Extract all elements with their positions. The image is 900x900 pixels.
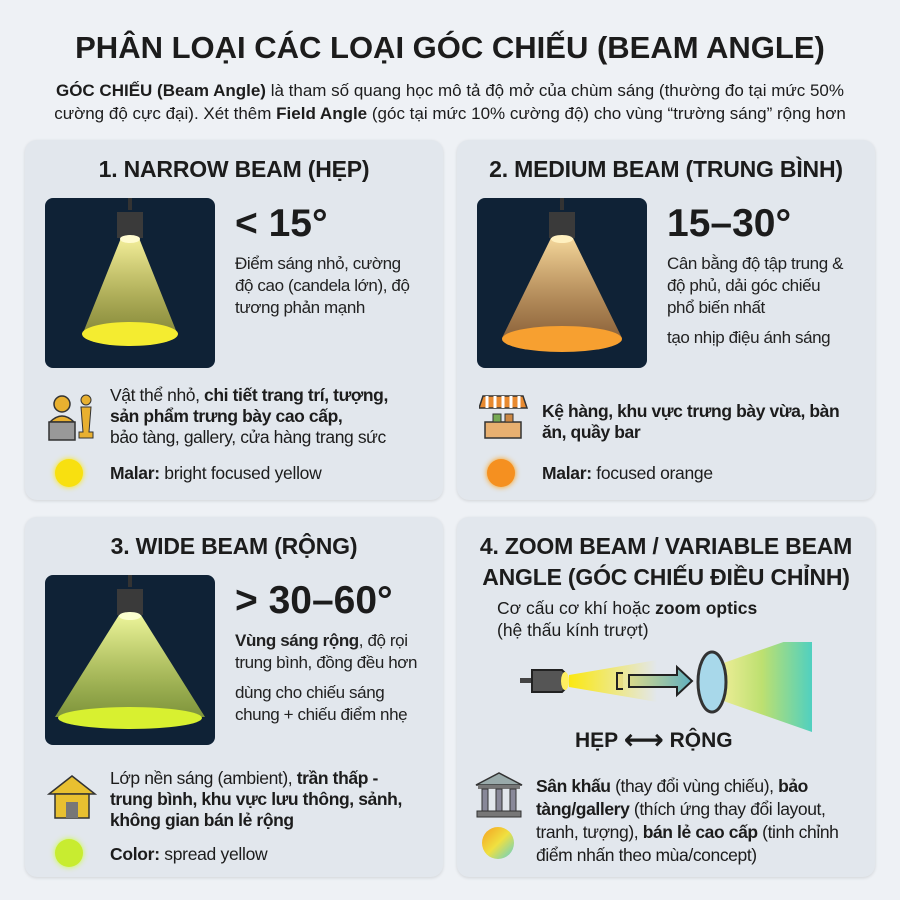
description: Vùng sáng rộng, độ rọi trung bình, đồng đều hơn [235,631,417,672]
description [667,254,844,347]
heading: 2. MEDIUM BEAM (TRUNG BÌNH) [489,156,843,182]
description [497,598,757,640]
illustration: narrow beam lamp [45,198,215,368]
description [235,631,417,724]
description: Cơ cấu cơ khí hoặc zoom optics [497,598,757,618]
icon: shop [479,395,528,439]
use cases: bảo tàng, gallery, cửa hàng trang sức [110,427,386,447]
description: dùng cho chiếu sáng chung + chiếu điểm nhẹ [235,683,407,724]
title: PHÂN LOẠI CÁC LOẠI GÓC CHIẾU (BEAM ANGLE) [75,30,825,65]
angle value: 15–30° [667,202,791,245]
use cases: Lớp nền sáng (ambient), trần thấp - trung bình, khu vực lưu thông, sảnh, không gian bán lẻ rộng [110,768,402,830]
heading: 1. NARROW BEAM (HẸP) [99,156,369,182]
heading: ANGLE (GÓC CHIẾU ĐIỀU CHỈNH) [482,564,850,590]
panel: medium beam [457,140,875,500]
subtitle [54,81,846,123]
subtitle: GÓC CHIẾU (Beam Angle) là tham số quang học mô tả độ mở của chùm sáng (thường đo tại mức 50% [56,81,844,100]
panel: narrow beam [25,140,443,500]
icon: museum [476,772,522,818]
use cases [110,385,388,447]
colour note: Malar: bright focused yellow [110,463,321,483]
illustration: wide beam lamp [45,575,215,745]
colour note: Malar: focused orange [542,463,713,483]
diagram: zoom optics [520,642,812,732]
subtitle: cường độ cực đại). Xét thêm Field Angle (góc tại mức 10% cường độ) cho vùng “trường sáng” rộng hơn [54,104,846,123]
heading [480,533,852,590]
angle value: < 15° [235,202,328,245]
panel: zoom beam [457,517,875,877]
description: tạo nhịp điệu ánh sáng [667,328,830,347]
icon: house [47,775,97,819]
angle value: > 30–60° [235,579,393,622]
panel: wide beam [25,517,443,877]
description: Cân bằng độ tập trung & độ phủ, dải góc chiếu phổ biến nhất [667,254,843,317]
colour swatch [55,839,83,867]
heading: 4. ZOOM BEAM / VARIABLE BEAM [480,533,852,559]
colour swatch: multi [482,827,514,859]
use cases: Sân khấu (thay đổi vùng chiếu), bảo tàng/gallery (thích ứng thay đổi layout, tranh, tượng), bán lẻ cao cấp (tinh chỉnh điểm nhấn theo mùa/concept) [536,776,839,865]
icon: statue [48,394,94,441]
colour swatch [55,459,83,487]
description: (hệ thấu kính trượt) [497,620,649,640]
label: narrow to wide: HẸP ⟷ RỘNG [575,724,733,755]
use cases: Vật thể nhỏ, chi tiết trang trí, tượng, sản phẩm trưng bày cao cấp, [110,385,388,426]
illustration: medium beam lamp [477,198,647,368]
description: Điểm sáng nhỏ, cường độ cao (candela lớn), độ tương phản mạnh [235,254,410,317]
colour note: Color: spread yellow [110,844,267,864]
use cases: Kệ hàng, khu vực trưng bày vừa, bàn ăn, quầy bar [542,401,839,442]
heading: 3. WIDE BEAM (RỘNG) [111,533,357,559]
colour swatch [487,459,515,487]
